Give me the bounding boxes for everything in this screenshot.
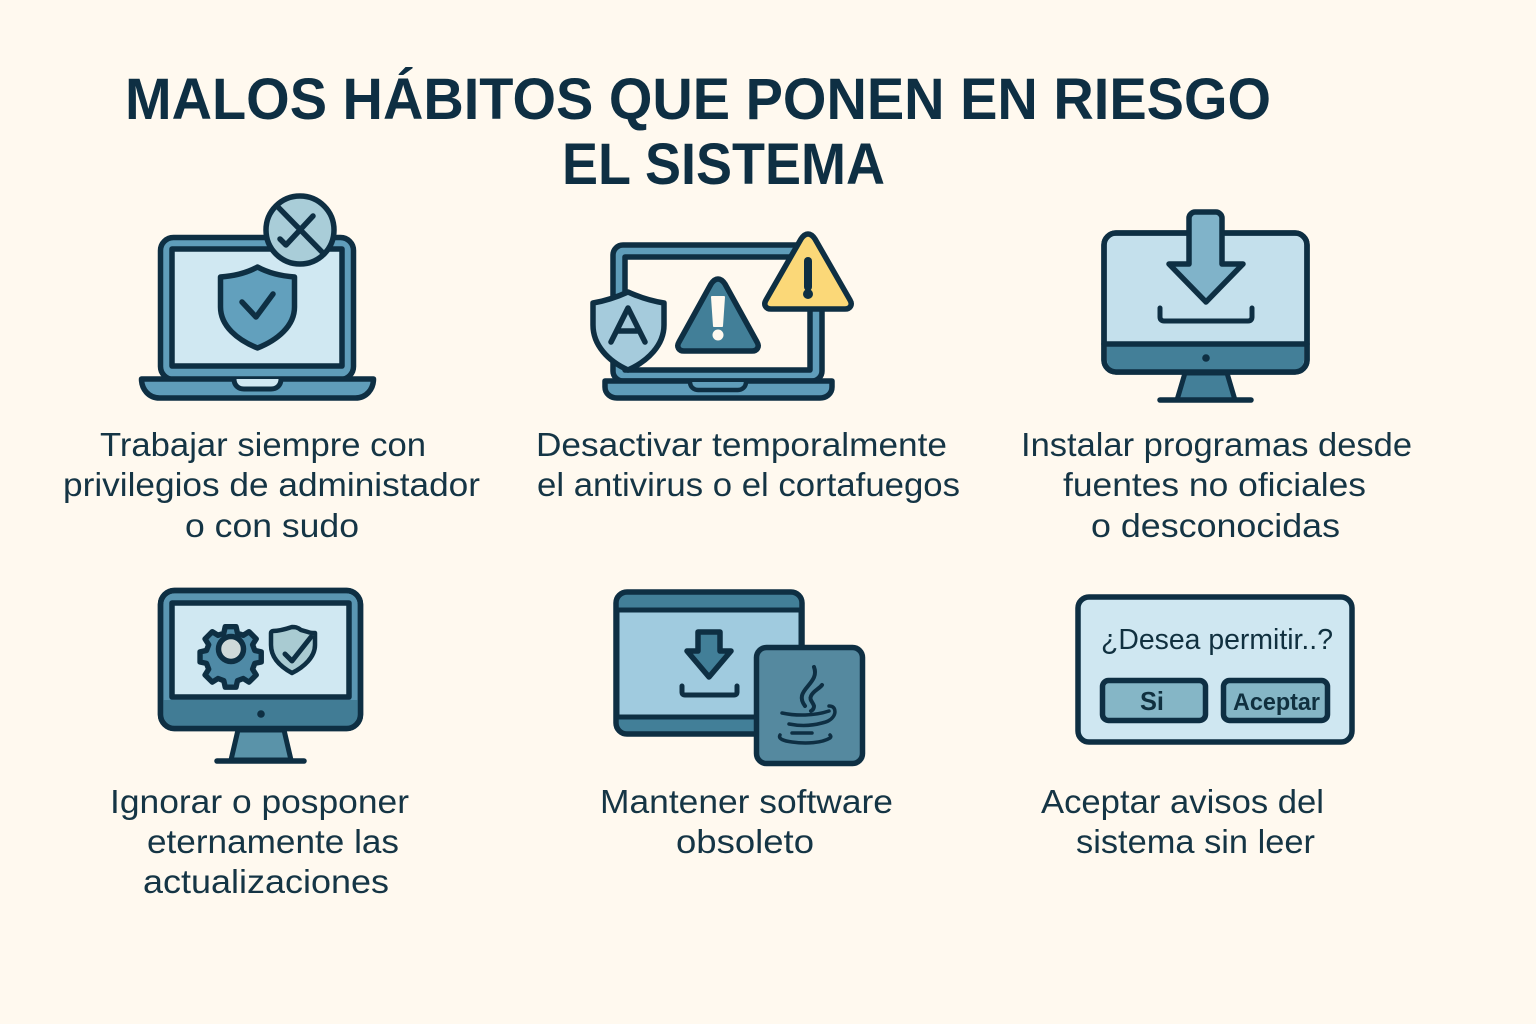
icon: dialog box: ¿Desea permitir..? <box>1101 624 1333 656</box>
text: desactivar antivirus: el antivirus o el cortafuegos <box>537 466 960 503</box>
text: ignorar actualizaciones: actualizaciones <box>143 863 389 900</box>
text: instalar programas: fuentes no oficiales <box>1063 466 1366 503</box>
panel: ignore updates <box>110 590 409 900</box>
icon: dialog box: Si <box>1140 686 1164 716</box>
text: instalar programas: o desconocidas <box>1091 507 1340 544</box>
text: trabajar siempre: Trabajar siempre con <box>100 426 426 463</box>
text: instalar programas <box>1021 426 1412 544</box>
text: desactivar antivirus <box>536 426 960 503</box>
panel: obsolete software <box>600 592 893 860</box>
panel: administrator privileges <box>63 196 480 544</box>
title: EL SISTEMA <box>562 132 885 197</box>
icon: window with download and java box <box>616 592 862 764</box>
icon: laptop with warnings <box>593 234 851 398</box>
text: aceptar avisos: Aceptar avisos del <box>1041 783 1324 820</box>
title: MALOS HÁBITOS QUE PONEN EN RIESGO <box>125 67 1271 132</box>
text: ignorar actualizaciones: Ignorar o posponer <box>110 783 409 820</box>
panel: unofficial installs <box>1021 212 1412 544</box>
text: instalar programas: Instalar programas desde <box>1021 426 1412 463</box>
text: aceptar avisos <box>1041 783 1324 860</box>
panel: accept notices <box>1041 597 1352 860</box>
panel: disable antivirus <box>536 234 960 503</box>
title <box>125 67 1271 197</box>
text: aceptar avisos: sistema sin leer <box>1076 823 1315 860</box>
icon: dialog box: Aceptar <box>1233 689 1320 716</box>
text: trabajar siempre: privilegios de administador <box>63 466 480 503</box>
icon: monitor with gear and shield <box>160 590 360 761</box>
text: mantener software: Mantener software <box>600 783 893 820</box>
text: ignorar actualizaciones <box>110 783 409 900</box>
icon: laptop with shield and cross <box>142 196 374 398</box>
text: mantener software <box>600 783 893 860</box>
text: mantener software: obsoleto <box>676 823 814 860</box>
icon: dialog box <box>1078 597 1352 742</box>
text: desactivar antivirus: Desactivar temporalmente <box>536 426 947 463</box>
icon: monitor with download arrow <box>1104 212 1307 400</box>
text: trabajar siempre <box>63 426 480 544</box>
text: trabajar siempre: o con sudo <box>185 507 359 544</box>
text: ignorar actualizaciones: eternamente las <box>147 823 399 860</box>
